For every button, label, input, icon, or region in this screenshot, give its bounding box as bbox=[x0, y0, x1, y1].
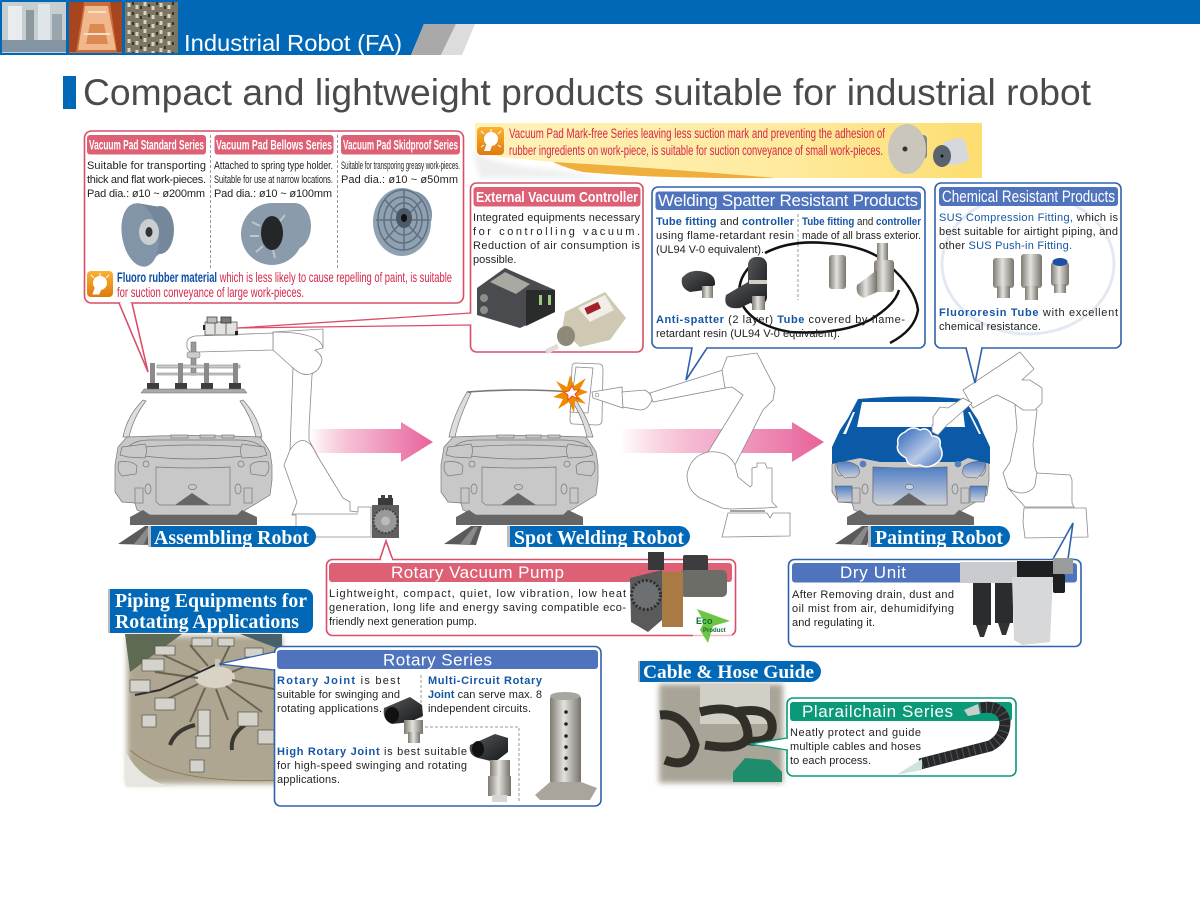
dry unit text: After Removing drain, dust and bbox=[792, 589, 954, 601]
panel: mark-free banner: Vacuum Pad Mark-free Series leaving less suction mark and preventing the adhesion of bbox=[509, 125, 885, 141]
icon: vacuum pump bbox=[630, 552, 727, 632]
icon: light bulb bbox=[87, 271, 113, 297]
heading: piping equipments: Piping Equipments for bbox=[115, 590, 307, 612]
welding column text: (UL94 V-0 equivalent). bbox=[656, 244, 764, 256]
vacuum pad descriptions bbox=[87, 160, 460, 200]
plarail text: multiple cables and hoses bbox=[790, 741, 922, 753]
icon: brass speed controller bbox=[857, 243, 894, 298]
icon: high rotary joint bbox=[470, 734, 511, 802]
rotary heading: Rotary Series bbox=[383, 650, 492, 670]
vacuum pad descriptions: Attached to spring type holder. bbox=[214, 160, 333, 172]
vacuum pad descriptions: Pad dia.: ø10 ~ ø200mm bbox=[87, 188, 205, 200]
vacuum pad headers: Vacuum Pad Skidproof Series bbox=[343, 136, 458, 152]
controller text: for controlling vacuum. bbox=[473, 226, 640, 238]
icon: rotary vacuum pump on robot bbox=[372, 495, 399, 538]
icon: vacuum gripper bbox=[141, 342, 247, 393]
welding column text bbox=[656, 216, 922, 340]
chemical text: other SUS Push-in Fitting. bbox=[939, 240, 1072, 252]
callout tail to valve bbox=[237, 313, 471, 328]
icon: eco product bbox=[693, 607, 732, 644]
controller text bbox=[473, 212, 640, 266]
rotary text: suitable for swinging and bbox=[277, 689, 400, 701]
panel: rotary vacuum pump bbox=[326, 541, 736, 644]
callout tail to photo bbox=[219, 652, 274, 670]
pump text: Lightweight, compact, quiet, low vibration, low heat bbox=[329, 588, 626, 600]
rotary text: applications. bbox=[277, 774, 340, 786]
main heading: Compact and lightweight products suitable for industrial robot bbox=[83, 72, 1092, 113]
controller text: Integrated equipments necessary bbox=[473, 212, 640, 224]
pump text: friendly next generation pump. bbox=[329, 616, 477, 628]
icon: light bulb bbox=[477, 127, 504, 155]
rotary text: Joint can serve max. 8 bbox=[428, 689, 542, 701]
car 2 bbox=[441, 390, 598, 545]
welding column text: Tube fitting and controller bbox=[656, 216, 795, 228]
welding column text: Anti-spatter (2 layer) Tube covered by flame- bbox=[656, 314, 905, 326]
panel: chemical resistant products bbox=[935, 183, 1121, 383]
pump heading: Rotary Vacuum Pump bbox=[391, 563, 564, 582]
heading: piping equipments bbox=[108, 589, 313, 633]
controller text: Reduction of air consumption is bbox=[473, 240, 640, 252]
icon: mark-free pads bbox=[888, 124, 970, 174]
dry unit text: oil mist from air, dehumidifying bbox=[792, 603, 954, 615]
dry unit text: and regulating it. bbox=[792, 617, 875, 629]
icon: cable chain bbox=[896, 704, 1005, 775]
label: spot welding robot: Spot Welding Robot bbox=[514, 527, 684, 549]
rotary text: Multi-Circuit Rotary bbox=[428, 675, 543, 687]
icon: anti-spatter black tube bbox=[739, 242, 918, 343]
vacuum pad headers: Vacuum Pad Standard Series bbox=[89, 136, 204, 152]
panel: external vacuum controller bbox=[237, 183, 643, 352]
plarail text: Neatly protect and guide bbox=[790, 727, 921, 739]
welding column text: retardant resin (UL94 V-0 equivalent). bbox=[656, 328, 840, 340]
icon: brass straight fitting bbox=[829, 255, 846, 289]
pump text bbox=[329, 588, 626, 628]
plarail heading: Plarailchain Series bbox=[802, 702, 953, 721]
vacuum pad descriptions: Pad dia.: ø10 ~ ø50mm bbox=[341, 174, 458, 186]
panel: vacuum pads bbox=[84, 131, 464, 372]
icon: dry unit device bbox=[960, 558, 1073, 645]
chemical text: chemical resistance. bbox=[939, 321, 1041, 333]
header title: Industrial Robot (FA) bbox=[184, 30, 402, 56]
photo: rotating table bbox=[125, 634, 282, 787]
panel: mark-free banner bbox=[472, 123, 982, 178]
vacuum pad descriptions: Suitable for use at narrow locations. bbox=[214, 174, 333, 186]
header photo: factory bbox=[2, 2, 66, 53]
car 1 bbox=[115, 400, 272, 545]
header photo: metal parts bbox=[125, 2, 178, 53]
plarail text bbox=[790, 727, 922, 767]
pump heading bbox=[329, 563, 732, 582]
welding column text: made of all brass exterior. bbox=[802, 230, 921, 242]
vacuum pad descriptions: Suitable for transporting bbox=[87, 160, 206, 172]
rotary text bbox=[277, 675, 543, 786]
icon: rotary joint bbox=[384, 697, 423, 743]
icon: vacuum sensor bbox=[546, 292, 626, 352]
callout tail to robot bbox=[966, 348, 982, 383]
welding heading: Welding Spatter Resistant Products bbox=[658, 191, 918, 210]
chemical heading: Chemical Resistant Products bbox=[942, 188, 1115, 206]
robot 3: painting bbox=[932, 352, 1088, 538]
icon: standard pad bbox=[117, 200, 174, 270]
callout tail to pump bbox=[380, 541, 392, 559]
panel: mark-free banner: rubber ingredients on work-piece, is suitable for suction conveyance of small work-pieces. bbox=[509, 142, 883, 158]
rotary text: for high-speed swinging and rotating bbox=[277, 760, 467, 772]
robot 2: spot welding bbox=[592, 353, 790, 537]
label: assembling robot: Assembling Robot bbox=[154, 527, 309, 549]
callout tail to chain bbox=[750, 738, 787, 750]
rotary text: High Rotary Joint is best suitable bbox=[277, 746, 467, 758]
icon: eco product: Product bbox=[703, 628, 726, 634]
chemical text bbox=[939, 212, 1118, 333]
vacuum pad descriptions: thick and flat work-pieces. bbox=[87, 174, 206, 186]
heading: piping equipments: Rotating Applications bbox=[115, 611, 299, 633]
panel: rotary series bbox=[219, 646, 601, 806]
icon: black elbow fitting bbox=[682, 271, 715, 298]
panel: plarailchain series bbox=[750, 698, 1016, 776]
controller heading: External Vacuum Controller bbox=[476, 189, 638, 206]
icon: bellows pad bbox=[241, 203, 311, 265]
photo: cable guide in factory bbox=[659, 684, 783, 783]
icon: multi-circuit rotary joint bbox=[535, 692, 597, 800]
robot 1: assembling bbox=[141, 317, 371, 537]
callout tail to gripper bbox=[119, 303, 148, 372]
dry unit text bbox=[792, 589, 954, 629]
chemical text: SUS Compression Fitting, which is bbox=[939, 212, 1118, 224]
icon: eco product: Eco bbox=[696, 616, 713, 626]
arrow 2 bbox=[620, 422, 824, 462]
icon: black speed controller bbox=[725, 257, 767, 310]
car 3: painted bbox=[832, 396, 990, 545]
fluoro rubber note: Fluoro rubber material which is less likely to cause repelling of paint, is suitable bbox=[117, 269, 452, 285]
header band bbox=[0, 0, 1200, 56]
icon: vacuum manifold bbox=[477, 268, 555, 328]
arrow 1 bbox=[310, 422, 433, 462]
rotary text: Rotary Joint is best bbox=[277, 675, 400, 687]
icon: fluororesin tube bbox=[942, 194, 1114, 334]
vacuum pad descriptions: Suitable for transporing greasy work-pieces. bbox=[341, 160, 460, 172]
icon: skidproof pad bbox=[373, 188, 432, 256]
chemical text: best suitable for airtight piping, and bbox=[939, 226, 1118, 238]
welding gun bbox=[570, 363, 603, 425]
vacuum pad headers: Vacuum Pad Bellows Series bbox=[216, 136, 332, 152]
rotary text: independent circuits. bbox=[428, 703, 531, 715]
vacuum pad headers bbox=[87, 135, 460, 154]
callout tail to robot bbox=[1053, 523, 1073, 559]
plarail heading bbox=[790, 702, 1012, 721]
controller text: possible. bbox=[473, 254, 516, 266]
icon: gripper valve bbox=[203, 317, 238, 335]
panel: dry unit bbox=[788, 523, 1081, 646]
icon: paint cloud bbox=[897, 428, 942, 467]
icon: SUS fittings bbox=[993, 254, 1069, 300]
dry unit heading bbox=[792, 563, 1077, 582]
plarail text: to each process. bbox=[790, 755, 871, 767]
fluoro rubber note bbox=[117, 269, 452, 300]
rotary text: rotating applications. bbox=[277, 703, 382, 715]
header photo: furnace bbox=[69, 2, 122, 53]
welding column text: using flame-retardant resin bbox=[656, 230, 794, 242]
dry unit heading: Dry Unit bbox=[840, 563, 906, 582]
pump text: generation, long life and energy saving compatible eco- bbox=[329, 602, 626, 614]
icon: welding spark bbox=[553, 375, 588, 413]
panel: welding spatter resistant products bbox=[652, 187, 925, 380]
rotary heading bbox=[277, 650, 598, 670]
fluoro rubber note: for suction conveyance of large work-pieces. bbox=[117, 284, 304, 300]
vacuum pad descriptions: Pad dia.: ø10 ~ ø100mm bbox=[214, 188, 332, 200]
welding column text: Tube fitting and controller bbox=[802, 216, 922, 228]
label: painting robot: Painting Robot bbox=[875, 527, 1003, 549]
chemical text: Fluororesin Tube with excellent bbox=[939, 307, 1118, 319]
heading: cable and hose guide: Cable & Hose Guide bbox=[643, 662, 814, 683]
callout tail to robot bbox=[686, 348, 707, 380]
